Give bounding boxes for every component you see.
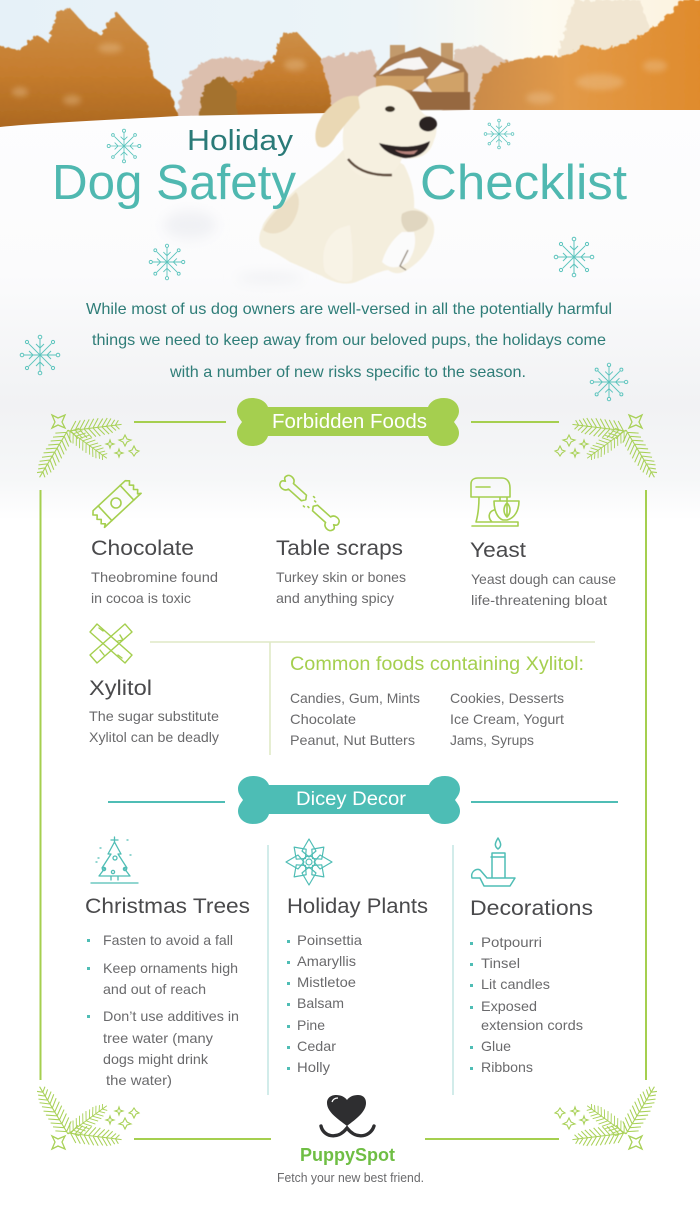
logo mark: heart nose and smile	[321, 1095, 374, 1136]
column: christmas trees: dogs might drink	[103, 1051, 209, 1067]
green frame lines	[40, 422, 646, 1139]
column: decorations: Glue	[481, 1038, 511, 1054]
decoration: bottom left pine sprig	[32, 1082, 139, 1149]
item: xylitol: The sugar substitute	[89, 708, 219, 724]
heading bone: Dicey Decor: Dicey Decor	[296, 789, 407, 810]
decoration: top left pine sprig	[32, 415, 139, 482]
photo: house	[373, 43, 470, 110]
column: christmas trees: Don’t use additives in	[103, 1008, 239, 1024]
icon: christmas tree	[91, 837, 138, 883]
item: yeast: Yeast dough can cause	[471, 571, 616, 587]
column: holiday plants: Holly	[297, 1059, 330, 1075]
column: christmas trees: tree water (many	[103, 1030, 213, 1046]
xylitol foods list	[290, 654, 584, 748]
bullets	[287, 940, 290, 1070]
xylitol divider lines	[150, 642, 595, 755]
column: holiday plants: Poinsettia	[297, 932, 362, 948]
bullets	[87, 939, 90, 1018]
item: yeast	[470, 478, 616, 608]
heading bone: Forbidden Foods: Forbidden Foods	[272, 411, 427, 433]
column: christmas trees	[85, 837, 250, 1088]
column: holiday plants: Cedar	[297, 1038, 336, 1054]
icon: snowflake	[484, 119, 514, 149]
item: chocolate: Chocolate	[91, 537, 194, 560]
item: yeast: Yeast	[470, 539, 526, 562]
item: xylitol: Xylitol	[89, 677, 152, 700]
item: yeast: life-threatening bloat	[471, 592, 607, 608]
xylitol foods list: Ice Cream, Yogurt	[450, 711, 564, 727]
column: holiday plants: Balsam	[297, 995, 344, 1011]
icon: poinsettia	[286, 839, 332, 885]
item: xylitol	[89, 624, 219, 745]
xylitol foods list: Candies, Gum, Mints	[290, 690, 420, 706]
footer logo: PuppySpot	[277, 1095, 424, 1185]
title: Holiday: Holiday	[187, 125, 294, 157]
intro text: with a number of new risks specific to the season.	[169, 364, 526, 381]
column: decorations: extension cords	[481, 1017, 583, 1033]
item: table scraps: and anything spicy	[276, 590, 394, 606]
item: chocolate	[91, 479, 218, 606]
column: decorations: Potpourri	[481, 934, 542, 950]
column: decorations: Decorations	[470, 897, 593, 920]
column: holiday plants: Holiday Plants	[287, 895, 428, 918]
xylitol foods list: Jams, Syrups	[450, 732, 534, 748]
icon: snowflake	[149, 244, 185, 280]
column: decorations: Ribbons	[481, 1059, 533, 1075]
photo: distant birch trees	[176, 0, 650, 118]
icon: chocolate bar	[91, 479, 141, 527]
icon: candle	[472, 838, 515, 886]
column: christmas trees: Keep ornaments high	[103, 960, 238, 976]
column: decorations	[470, 838, 593, 1075]
item: chocolate: Theobromine found	[91, 569, 218, 585]
icon: snowflake	[554, 237, 594, 277]
bullets	[470, 942, 473, 1070]
xylitol foods list: Chocolate	[290, 711, 356, 727]
photo: snow drift shadows	[164, 211, 304, 283]
column: christmas trees: and out of reach	[103, 981, 206, 997]
item: table scraps: Table scraps	[276, 537, 403, 560]
footer logo: PuppySpot: Fetch your new best friend.	[277, 1170, 424, 1185]
column: holiday plants: Amaryllis	[297, 953, 356, 969]
decor column dividers	[268, 845, 453, 1095]
decoration: bottom right pine sprig	[555, 1082, 662, 1149]
heading bone: Dicey Decor	[238, 776, 460, 824]
column: decorations: Tinsel	[481, 955, 520, 971]
heading bone: Forbidden Foods	[237, 398, 459, 446]
column: decorations: Exposed	[481, 998, 537, 1014]
icon: snowflake	[20, 335, 60, 375]
column: holiday plants	[286, 839, 428, 1075]
item: chocolate: in cocoa is toxic	[91, 590, 191, 606]
icon: snowflake	[107, 129, 141, 163]
title: Dog Safety: Dog Safety	[52, 156, 296, 210]
column: holiday plants: Pine	[297, 1017, 325, 1033]
column: christmas trees: Fasten to avoid a fall	[103, 932, 233, 948]
decoration: top right pine sprig	[555, 415, 662, 482]
xylitol foods list: Peanut, Nut Butters	[290, 732, 415, 748]
photo: golden retriever puppy	[259, 85, 437, 284]
teal divider lines	[108, 801, 618, 803]
icon: snowflake	[590, 363, 628, 401]
white lower page	[0, 520, 700, 1216]
xylitol foods list: Common foods containing Xylitol:	[290, 654, 584, 675]
column: holiday plants: Mistletoe	[297, 974, 356, 990]
icon: broken bone	[278, 474, 341, 532]
photo: orange pine trees, left	[0, 8, 333, 134]
column: christmas trees: the water)	[106, 1072, 172, 1088]
xylitol foods list: Cookies, Desserts	[450, 690, 564, 706]
item: table scraps	[276, 474, 406, 606]
photo background: snow fading to white	[0, 110, 700, 520]
photo: soft light patches on trees	[12, 43, 667, 105]
intro text: things we need to keep away from our beloved pups, the holidays come	[92, 332, 606, 349]
photo: orange pine trees, right	[470, 0, 700, 118]
item: xylitol: Xylitol can be deadly	[89, 729, 219, 745]
item: table scraps: Turkey skin or bones	[276, 569, 406, 585]
intro text: While most of us dog owners are well-versed in all the potentially harmful	[86, 301, 612, 318]
column: decorations: Lit candles	[481, 976, 550, 992]
intro text	[86, 301, 612, 381]
column: christmas trees: Christmas Trees	[85, 895, 250, 918]
icon: crossed gum sticks	[90, 624, 132, 663]
icon: stand mixer	[471, 478, 519, 526]
footer logo: PuppySpot: PuppySpot	[300, 1145, 395, 1165]
photo background: sky	[0, 0, 700, 130]
title: Checklist: Checklist	[420, 156, 627, 210]
